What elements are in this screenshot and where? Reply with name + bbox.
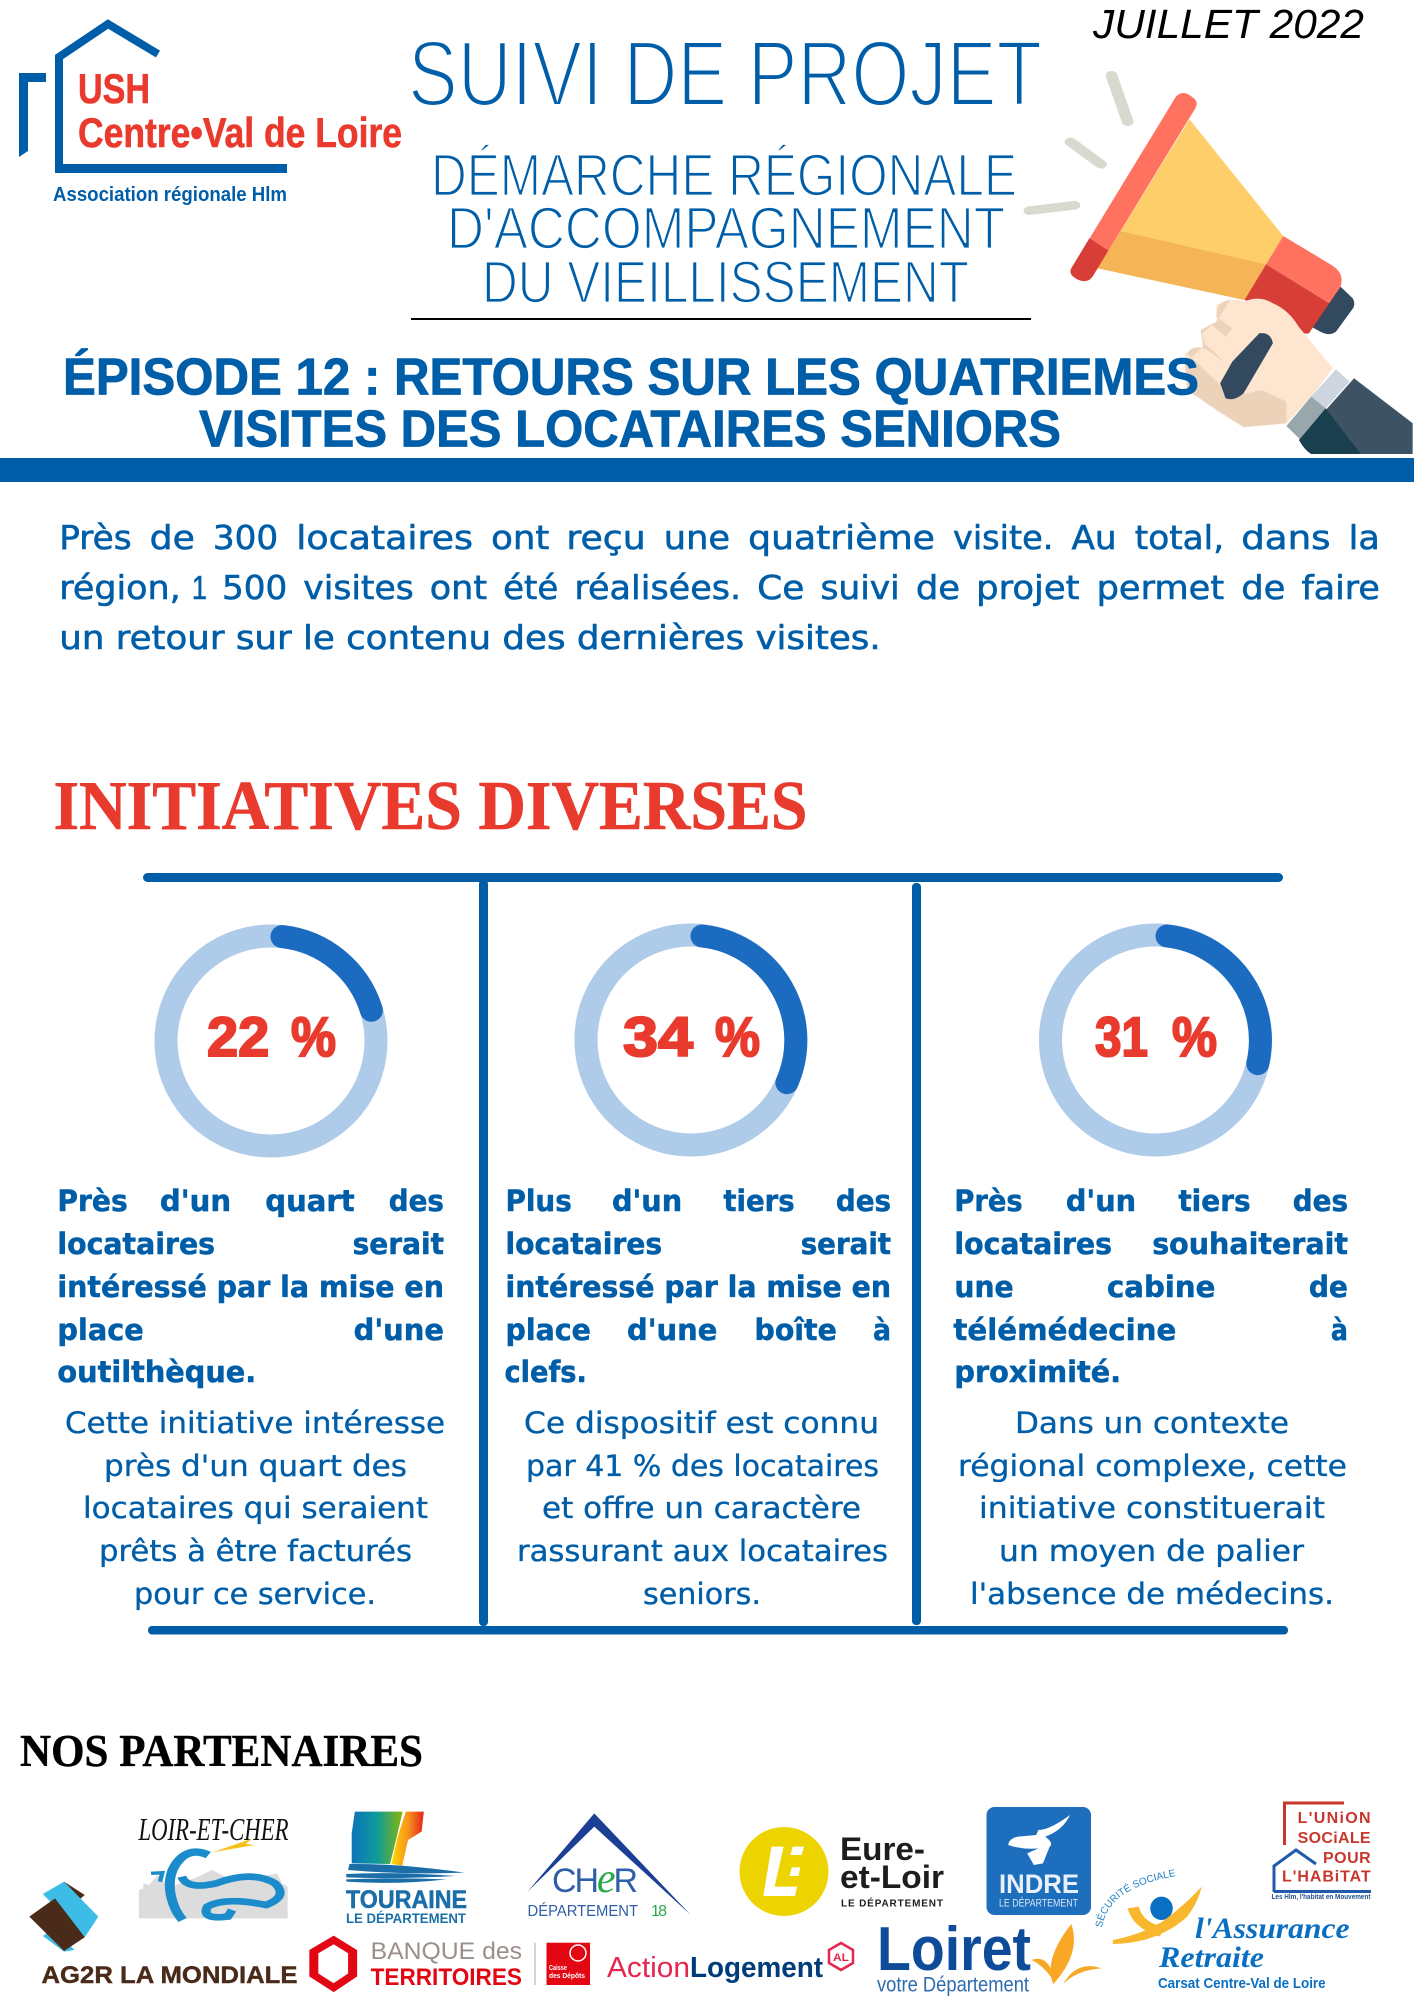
intro text: ont	[491, 518, 549, 557]
logo: L'Assurance Retraite: Carsat Centre-Val de Loire	[1158, 1975, 1326, 1992]
donut chart: 34 %	[586, 935, 796, 1145]
donut chart: 34 %: 34	[623, 1005, 693, 1068]
panel: initiative télémédecine	[953, 935, 1348, 1611]
detail text 1: locataires qui seraient	[83, 1491, 428, 1525]
key finding 3: télémédecine	[953, 1313, 1176, 1347]
episode heading: ÉPISODE 12 : RETOURS SUR LES QUATRIEMES	[63, 348, 1199, 406]
intro text: dans	[1241, 518, 1331, 557]
key finding 1: Près	[57, 1184, 128, 1218]
intro text: 300	[213, 518, 278, 557]
detail text 2: et offre un caractère	[542, 1491, 861, 1525]
logo: AG2R La Mondiale	[29, 1882, 297, 1989]
key finding 2: tiers	[723, 1184, 795, 1218]
logo: Touraine le département	[346, 1812, 467, 1926]
detail text 2: rassurant aux locataires	[517, 1534, 888, 1568]
subtitle: DU VIEILLISSEMENT	[482, 250, 969, 316]
detail text 1: prêts à être facturés	[99, 1534, 412, 1568]
key finding 3: d'un	[1066, 1184, 1136, 1218]
logo: Eure-et-Loir: LE DÉPARTEMENT	[841, 1896, 943, 1910]
episode heading	[63, 348, 1199, 458]
key finding 3: proximité.	[954, 1355, 1121, 1389]
key finding 2: Plus	[506, 1184, 572, 1218]
logo: Loiret votre département: Loiret	[877, 1915, 1031, 1984]
detail text 3: régional complexe, cette	[958, 1449, 1347, 1483]
key finding 1: locataires	[57, 1227, 215, 1261]
key finding 3	[953, 1184, 1348, 1389]
intro text: projet	[976, 568, 1080, 607]
intro text: visites	[303, 568, 414, 607]
detail text 1	[65, 1406, 445, 1611]
detail text 1: près d'un quart des	[104, 1449, 407, 1483]
key finding 1: place	[57, 1313, 144, 1347]
logo: Banque des Territoires: BANQUE des	[371, 1938, 522, 1965]
intro text: 1	[192, 570, 207, 607]
intro text: Au	[1071, 518, 1117, 557]
intro text: été	[503, 568, 558, 607]
logo: Action Logement: Logement	[690, 1952, 823, 1984]
detail text 1: Cette initiative intéresse	[65, 1406, 445, 1440]
logo: Indre le département: LE DÉPARTEMENT	[999, 1896, 1078, 1910]
logo: Banque des Territoires: des Dépôts	[549, 1973, 585, 1980]
intro text: de	[150, 518, 195, 557]
partners heading: NOS PARTENAIRES	[20, 1726, 423, 1776]
intro text	[59, 518, 1380, 657]
logo: L'Assurance Retraite: SÉCURITÉ SOCIALE	[1096, 1869, 1176, 1928]
logo: Eure-et-Loir: Eure-	[840, 1831, 925, 1867]
key finding 3: de	[1309, 1270, 1348, 1304]
intro text: faire	[1301, 568, 1380, 607]
icon: megaphone held by a hand	[1029, 75, 1413, 454]
logo: L'Assurance Retraite: Retraite	[1158, 1941, 1264, 1974]
key finding 2: serait	[801, 1227, 891, 1261]
key finding 1: d'une	[354, 1313, 444, 1347]
logo: Action Logement	[607, 1943, 853, 1984]
logo: L'Union sociale pour l'habitat: L'HABiTAT	[1282, 1868, 1371, 1886]
logo: L'Assurance Retraite	[1096, 1869, 1350, 1992]
key finding 1: des	[389, 1184, 444, 1218]
key finding 3: Près	[954, 1184, 1023, 1218]
logo: L'Union sociale pour l'habitat: SOCiALE	[1298, 1830, 1371, 1847]
logo: Loir-et-Cher	[138, 1811, 289, 1920]
intro text: Ce	[757, 568, 804, 607]
key finding 2: à	[873, 1313, 891, 1347]
key finding 2: clefs.	[505, 1355, 587, 1389]
detail text 3: Dans un contexte	[1015, 1406, 1289, 1440]
detail text 2: par 41 % des locataires	[526, 1449, 879, 1483]
logo: USH Centre-Val de Loire: USH	[78, 65, 150, 112]
logo: L'Union sociale pour l'habitat: POUR	[1323, 1850, 1371, 1867]
subtitle: DÉMARCHE RÉGIONALE	[431, 142, 1017, 208]
intro text: reçu	[566, 518, 646, 557]
intro text: de	[1241, 568, 1285, 607]
detail text 3	[958, 1406, 1347, 1611]
detail text 3: un moyen de palier	[999, 1534, 1304, 1568]
intro text: quatrième	[748, 518, 935, 557]
key finding 1: d'un	[160, 1184, 231, 1218]
subtitle	[431, 142, 1017, 316]
key finding 3: souhaiterait	[1152, 1227, 1348, 1261]
logo: Banque des Territoires	[314, 1938, 590, 1991]
logo: USH Centre-Val de Loire	[19, 24, 402, 206]
intro text: total,	[1135, 518, 1224, 557]
logo: USH Centre-Val de Loire: Centre•Val de Loire	[78, 109, 402, 156]
donut chart: 31 %: 31	[1095, 1005, 1148, 1068]
logo: Touraine le département: LE DÉPARTEMENT	[346, 1910, 466, 1926]
logo: Banque des Territoires: Caisse	[549, 1965, 567, 1972]
intro text: 500	[222, 568, 287, 607]
logo: Indre le département	[986, 1807, 1091, 1915]
logo: L'Union sociale pour l'habitat	[1272, 1803, 1371, 1901]
logo: L'Assurance Retraite: l'Assurance	[1195, 1912, 1350, 1945]
donut chart: 31 %	[1050, 935, 1260, 1145]
key finding 3: une	[954, 1270, 1014, 1304]
intro text: permet	[1097, 568, 1224, 607]
logo: Cher département 18: CHeR	[552, 1856, 638, 1902]
detail text 2: seniors.	[643, 1577, 761, 1611]
key finding 2	[505, 1184, 891, 1389]
intro text: de	[916, 568, 960, 607]
intro text: locataires	[296, 518, 473, 557]
logo: Banque des Territoires: TERRITOIRES	[371, 1964, 522, 1991]
logo: Action Logement: AL	[833, 1952, 849, 1964]
key finding 2: boîte	[755, 1313, 837, 1347]
detail text 3: initiative constituerait	[979, 1491, 1325, 1525]
key finding 3: locataires	[954, 1227, 1112, 1261]
logo: Action Logement: Action	[607, 1952, 690, 1984]
logo: Eure-et-Loir: et-Loir	[840, 1859, 944, 1895]
donut chart: 22 %: %	[291, 1005, 336, 1068]
date: JUILLET 2022	[1092, 1, 1364, 47]
intro text: région,	[59, 568, 181, 607]
key finding 1	[57, 1184, 444, 1389]
section heading: INITIATIVES DIVERSES	[54, 768, 808, 845]
key finding 2: locataires	[506, 1227, 662, 1261]
key finding 1: serait	[353, 1227, 444, 1261]
intro text: la	[1349, 518, 1380, 557]
key finding 1: outilthèque.	[57, 1355, 256, 1389]
logo: L'Union sociale pour l'habitat: Les Hlm, l'habitat en Mouvement	[1272, 1894, 1371, 1901]
intro text: réalisées.	[574, 568, 741, 607]
intro text: une	[664, 518, 730, 557]
panel: initiative boîte à clefs	[505, 935, 891, 1611]
detail text 2: Ce dispositif est connu	[524, 1406, 879, 1440]
logo: Loiret votre département: votre Département	[877, 1974, 1029, 1996]
donut chart: 31 %: %	[1172, 1005, 1217, 1068]
logo: Cher département 18: 18	[651, 1903, 667, 1920]
logo: Loir-et-Cher: LOIR-ET-CHER	[138, 1811, 289, 1847]
key finding 3: des	[1293, 1184, 1348, 1218]
key finding 3: cabine	[1107, 1270, 1215, 1304]
logo: Touraine le département: TOURAINE	[346, 1886, 467, 1914]
detail text 3: l'absence de médecins.	[970, 1577, 1334, 1611]
key finding 1: intéressé par la mise en	[57, 1270, 444, 1304]
panel: initiative outilthèque	[57, 936, 445, 1611]
key finding 2: des	[836, 1184, 891, 1218]
logo: AG2R La Mondiale: AG2R LA MONDIALE	[42, 1962, 298, 1989]
logo: L'Union sociale pour l'habitat: L'UNiON	[1298, 1810, 1371, 1827]
logo: Cher département 18: DÉPARTEMENT	[528, 1901, 638, 1920]
intro text: un retour sur le contenu des dernières visites.	[59, 618, 881, 657]
donut chart: 34 %: %	[715, 1005, 760, 1068]
key finding 2: intéressé par la mise en	[506, 1270, 891, 1304]
logo: Loiret votre département	[877, 1915, 1102, 1996]
title: SUIVI DE PROJET	[408, 22, 1042, 126]
key finding 2: d'une	[627, 1313, 717, 1347]
logo: USH Centre-Val de Loire: Association régionale Hlm	[53, 184, 287, 206]
subtitle: D'ACCOMPAGNEMENT	[447, 196, 1005, 262]
logo: Eure-et-Loir	[740, 1827, 944, 1916]
key finding 1: quart	[265, 1184, 355, 1218]
logo: Indre le département: INDRE	[999, 1869, 1079, 1899]
key finding 2: d'un	[612, 1184, 682, 1218]
key finding 3: tiers	[1178, 1184, 1251, 1218]
donut chart: 22 %: 22	[207, 1005, 269, 1068]
intro text: suivi	[820, 568, 900, 607]
episode heading: VISITES DES LOCATAIRES SENIORS	[199, 400, 1061, 458]
key finding 2: place	[506, 1313, 591, 1347]
detail text 1: pour ce service.	[134, 1577, 376, 1611]
donut chart: 22 %	[166, 936, 376, 1146]
key finding 3: à	[1331, 1313, 1348, 1347]
intro text: ont	[430, 568, 487, 607]
logo: Cher département 18	[528, 1813, 691, 1920]
detail text 2	[517, 1406, 888, 1611]
intro text: visite.	[953, 518, 1053, 557]
intro text: Près	[59, 518, 132, 557]
